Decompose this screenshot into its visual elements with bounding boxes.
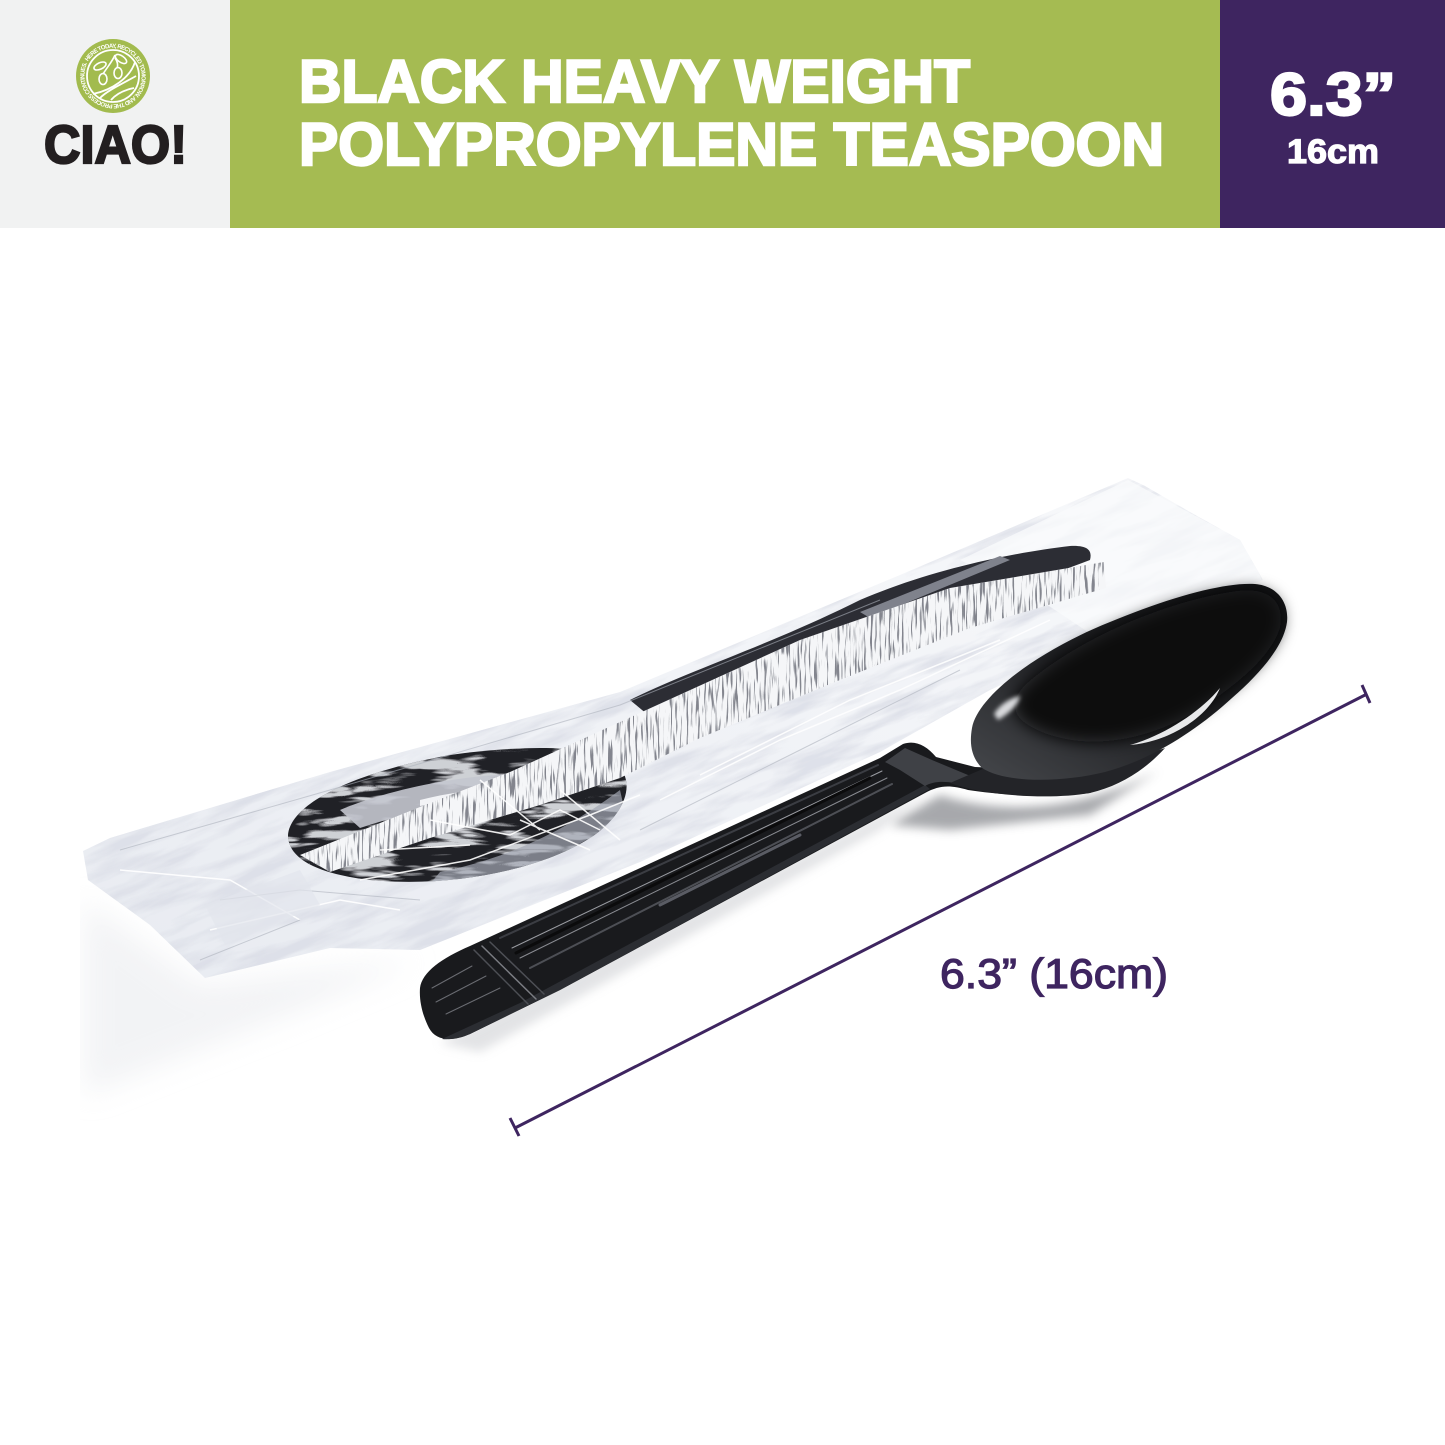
- unwrapped black spoon: [420, 584, 1287, 1039]
- spoon cast shadow: [890, 770, 1160, 830]
- rear film seal: [205, 870, 320, 945]
- product photo: wrapped and unwrapped spoon: [83, 478, 1335, 1119]
- header: title panel: [230, 0, 1220, 228]
- header: size panel: [1220, 0, 1445, 228]
- dimension label: 6.3” (16cm): [940, 950, 1168, 997]
- spoon handle and neck: [420, 743, 1130, 1039]
- bowl highlights: [994, 696, 1020, 720]
- size in centimetres: 16cm: [1287, 133, 1379, 171]
- header: logo panel: [0, 0, 230, 228]
- dimension arrow: [510, 685, 1370, 1136]
- icon: Ciao round olive badge: HERE TODAY, RECYCLED TOMORROW. AND THE PROCESS CONTINUES.: [80, 44, 146, 108]
- title: BLACK HEAVY WEIGHT: [299, 48, 970, 115]
- spoon handle ribs: [432, 765, 892, 1014]
- soft shadows: [90, 925, 330, 1078]
- title: POLYPROPYLENE TEASPOON: [299, 111, 1164, 178]
- wrapped spoon in clear film: [83, 478, 1262, 978]
- inner spoon bowl: [288, 748, 627, 882]
- logo wordmark: CIAO!: [44, 115, 187, 175]
- spoon bowl underside rim: [950, 748, 1165, 796]
- film creases: [120, 620, 1050, 930]
- crimped seal strip: [300, 562, 1106, 872]
- spoon bowl: [971, 584, 1287, 780]
- handle lower bevel: [442, 785, 930, 1039]
- inner spoon handle dark band: [630, 546, 1091, 725]
- title: [299, 48, 1164, 178]
- size in inches: 6.3”: [1270, 61, 1396, 128]
